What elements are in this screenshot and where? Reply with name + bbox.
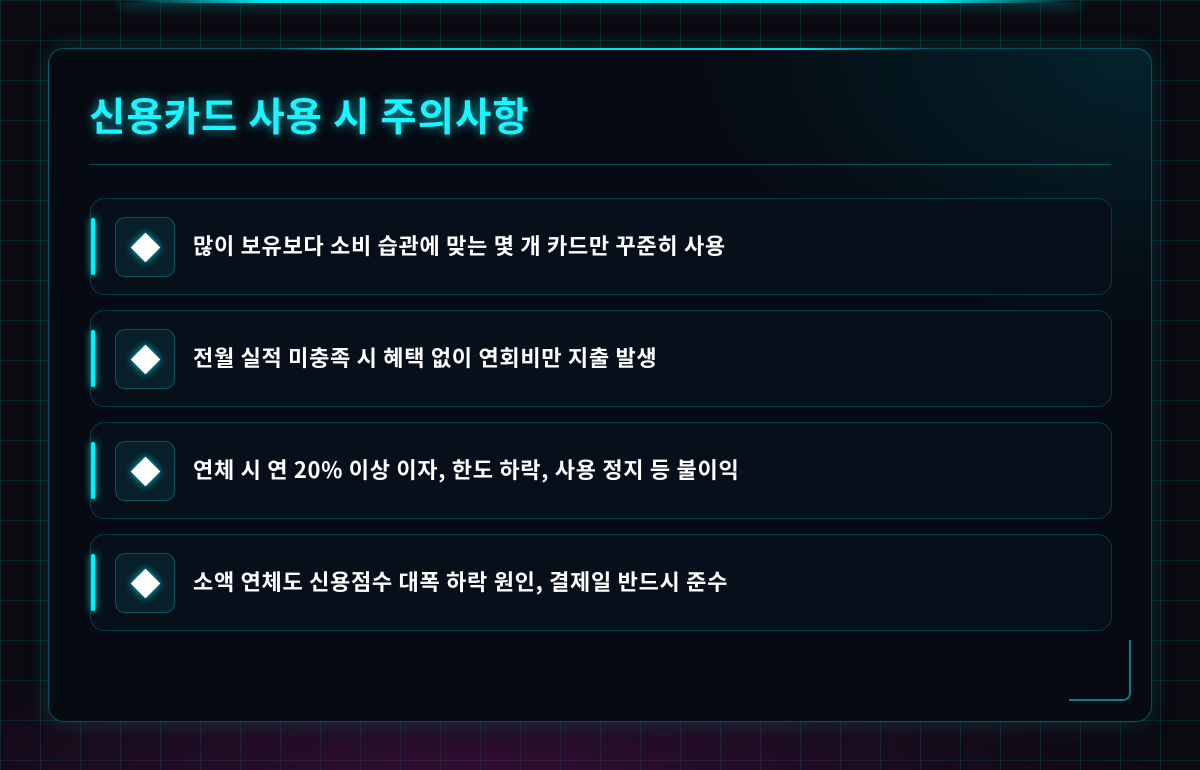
text 2: 전월 실적 미충족 시 혜택 없이 연회비만 지출 발생 bbox=[193, 341, 657, 373]
icon: diamond bbox=[115, 217, 175, 277]
icon: diamond bbox=[115, 329, 175, 389]
item 1 bbox=[90, 198, 1112, 295]
icon: diamond bbox=[115, 441, 175, 501]
text 3: 연체 시 연 20% 이상 이자, 한도 하락, 사용 정지 등 불이익 bbox=[193, 453, 739, 485]
title: 신용카드 사용 시 주의사항 bbox=[89, 86, 530, 143]
item 3 bbox=[90, 422, 1112, 519]
item 2 bbox=[90, 310, 1112, 407]
text 1: 많이 보유보다 소비 습관에 맞는 몇 개 카드만 꾸준히 사용 bbox=[193, 229, 726, 261]
text 4: 소액 연체도 신용점수 대폭 하락 원인, 결제일 반드시 준수 bbox=[193, 565, 728, 597]
corner bracket bbox=[1069, 640, 1131, 701]
icon: diamond bbox=[115, 553, 175, 613]
item 4 bbox=[90, 534, 1112, 631]
